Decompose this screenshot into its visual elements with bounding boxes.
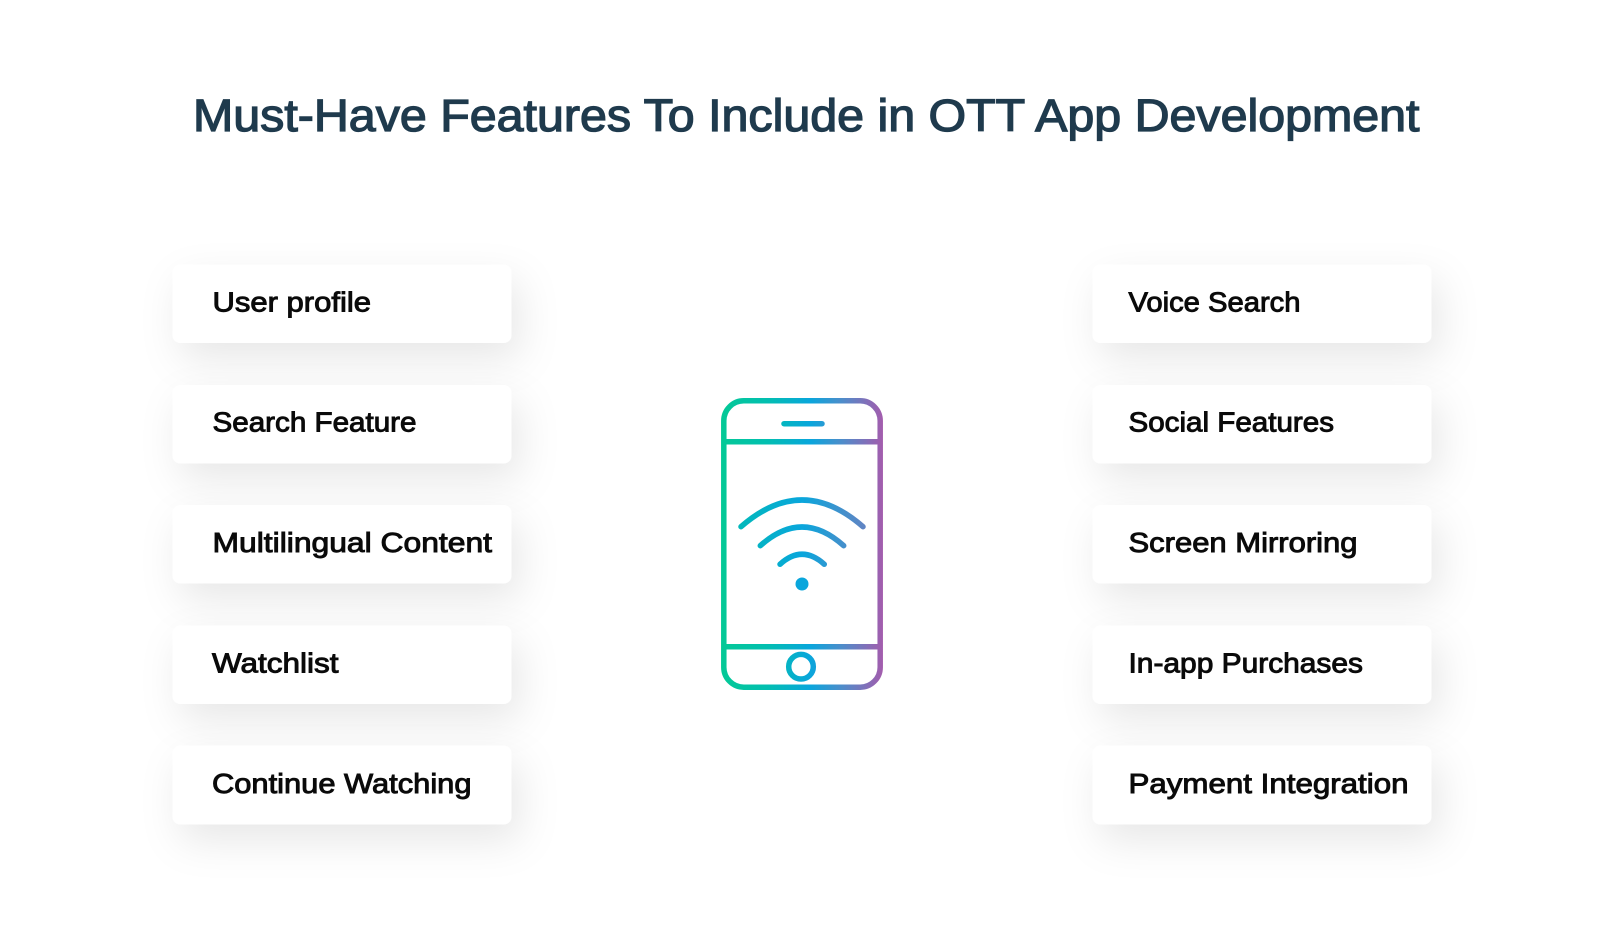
card: Continue Watching	[172, 746, 512, 824]
card: In-app Purchases: In-app Purchases	[1128, 648, 1363, 678]
card: User profile: User profile	[212, 286, 371, 318]
card: User profile	[172, 264, 512, 343]
card: Continue Watching: Continue Watching	[212, 768, 472, 799]
card: Voice Search: Voice Search	[1128, 286, 1300, 318]
card: Multilingual Content	[172, 505, 512, 584]
card: Search Feature: Search Feature	[212, 406, 416, 438]
card: In-app Purchases	[1092, 626, 1432, 704]
card: Screen Mirroring	[1092, 505, 1432, 584]
card: Voice Search	[1092, 264, 1432, 343]
left feature column	[172, 264, 512, 824]
right feature column	[1092, 264, 1432, 824]
card: Payment Integration	[1092, 746, 1432, 824]
card: Multilingual Content: Multilingual Content	[212, 527, 492, 558]
card: Search Feature	[172, 385, 512, 464]
card: Watchlist	[172, 626, 512, 704]
card: Social Features: Social Features	[1128, 406, 1334, 438]
card: Social Features	[1092, 385, 1432, 464]
card: Screen Mirroring: Screen Mirroring	[1128, 527, 1358, 558]
card: Watchlist: Watchlist	[212, 648, 339, 678]
title: Must-Have Features To Include in OTT App Development	[193, 90, 1420, 141]
card: Payment Integration: Payment Integration	[1128, 768, 1408, 799]
icon: smartphone with wifi signal	[724, 401, 880, 687]
